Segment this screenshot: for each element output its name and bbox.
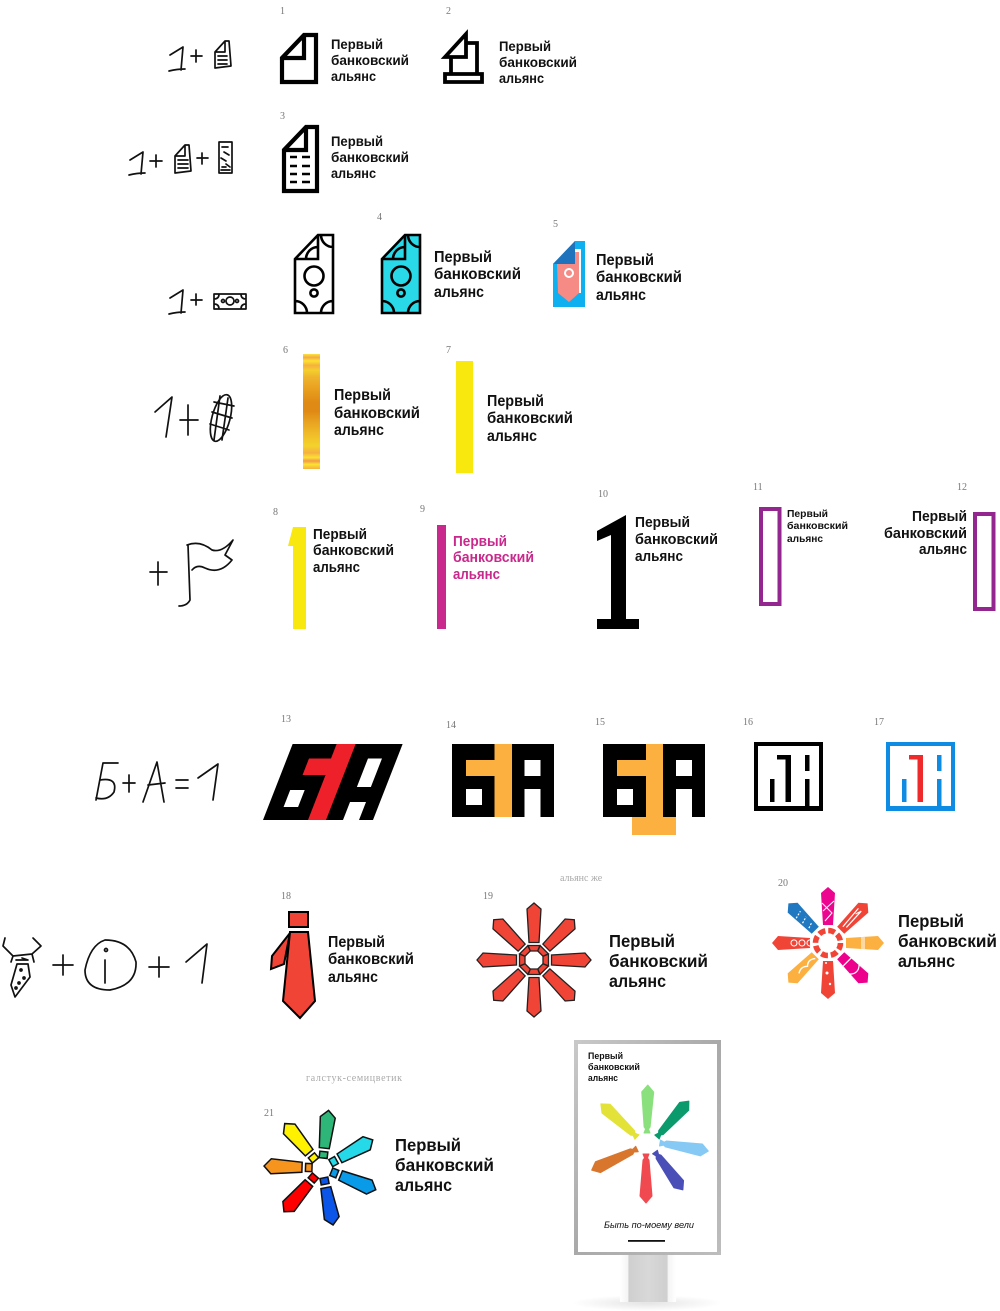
- caption: галстук-семицветик: галстук-семицветик: [306, 1073, 402, 1084]
- sketch: tie + i + 1: [3, 938, 207, 997]
- sketch: 1 + document: [169, 41, 231, 71]
- number 19: 19: [483, 891, 493, 902]
- logo 1: банковский: [331, 52, 409, 68]
- sketch: Б + А = 1: [96, 762, 218, 802]
- logo 8: банковский: [313, 543, 394, 559]
- logo 5: [553, 241, 682, 307]
- number 20: 20: [778, 878, 788, 889]
- poster stand mockup: альянс: [588, 1073, 618, 1084]
- number 18: 18: [281, 891, 291, 902]
- logo 9: банковский: [453, 550, 534, 566]
- logo 20: patterned tie star: альянс: [898, 951, 955, 971]
- logo 7: [456, 361, 573, 473]
- logo 12: Первый: [912, 508, 967, 525]
- poster stand mockup: банковский: [588, 1062, 640, 1073]
- logo 17: blue framed monogram: [886, 742, 955, 811]
- number 13: 13: [281, 714, 291, 725]
- logo 1: [282, 35, 409, 84]
- logo 6: альянс: [334, 422, 384, 439]
- logo 12: [884, 508, 994, 609]
- logo 21: rainbow tie star: альянс: [395, 1175, 452, 1195]
- logo 11: альянс: [787, 533, 823, 545]
- logo 20: patterned tie star: [772, 887, 997, 999]
- logo 11: Первый: [787, 508, 828, 520]
- logo 6: [303, 354, 420, 469]
- sketch: 1 + coin: [155, 392, 236, 444]
- logo 21: rainbow tie star: банковский: [395, 1155, 494, 1175]
- sketch: plus flag: [150, 540, 233, 606]
- logo 12: альянс: [919, 541, 967, 558]
- poster stand mockup: Быть по-моему вели: [604, 1220, 694, 1230]
- logo 8: альянс: [313, 560, 360, 576]
- poster stand mockup: [572, 1040, 722, 1311]
- logo 18: red tie: альянс: [328, 969, 378, 986]
- logo 11: [761, 508, 848, 604]
- logo 21: rainbow tie star: Первый: [395, 1135, 461, 1155]
- logo 11: банковский: [787, 520, 848, 532]
- logo 4: альянс: [434, 284, 484, 301]
- number 3: 3: [280, 111, 285, 122]
- logo 7: Первый: [487, 393, 544, 410]
- number 4: 4: [377, 212, 382, 223]
- logo 4: [382, 235, 521, 313]
- number 8: 8: [273, 507, 278, 518]
- logo 6: банковский: [334, 405, 420, 422]
- number 9: 9: [420, 504, 425, 515]
- logo 10: альянс: [635, 548, 683, 565]
- logo 20: patterned tie star: Первый: [898, 911, 964, 931]
- logo 15: BA with extended stem: [603, 744, 705, 835]
- logo 20: patterned tie star: банковский: [898, 931, 997, 951]
- logo 16: framed monogram: [754, 742, 823, 811]
- number 1: 1: [280, 6, 285, 17]
- logo 1: Первый: [331, 36, 383, 52]
- logo 1: альянс: [331, 68, 376, 84]
- logo 2: [445, 34, 577, 86]
- logo 19: red tie star: банковский: [609, 951, 708, 971]
- logo 3: банковский: [331, 149, 409, 165]
- logo 4: банковский: [434, 266, 521, 283]
- logo 4: Первый: [434, 249, 492, 266]
- logo 12: банковский: [884, 525, 967, 542]
- logo 5: альянс: [596, 287, 646, 304]
- sketch: 1 + document + column: [129, 142, 232, 175]
- number 21: 21: [264, 1108, 274, 1119]
- number 10: 10: [598, 489, 608, 500]
- number 5: 5: [553, 219, 558, 230]
- logo 13: BA parallelogram: [263, 744, 403, 820]
- number 15: 15: [595, 717, 605, 728]
- poster stand mockup: Первый: [588, 1051, 623, 1062]
- number 16: 16: [743, 717, 753, 728]
- logo 18: red tie: Первый: [328, 934, 385, 951]
- logo 7: альянс: [487, 428, 537, 445]
- logo 14: BA square: [452, 744, 554, 817]
- logo 19: red tie star: Первый: [609, 931, 675, 951]
- logo 10: [597, 514, 718, 629]
- logo 10: Первый: [635, 514, 690, 531]
- logo 3: [284, 127, 409, 191]
- logo 18: red tie: банковский: [328, 951, 414, 968]
- logo 7: банковский: [487, 410, 573, 427]
- logo 21: rainbow tie star: [264, 1110, 494, 1226]
- logo 10: банковский: [635, 531, 718, 548]
- logo 3: Первый: [331, 133, 383, 149]
- logo 19: red tie star: альянс: [609, 971, 666, 991]
- logo 5: Первый: [596, 252, 654, 269]
- logo 3: альянс: [331, 165, 376, 181]
- number 11: 11: [753, 482, 763, 493]
- number 7: 7: [446, 345, 451, 356]
- logo 2: Первый: [499, 38, 551, 54]
- number 6: 6: [283, 345, 288, 356]
- number 17: 17: [874, 717, 884, 728]
- sketch: 1 + banknote: [169, 290, 246, 314]
- logo 9: [437, 525, 534, 629]
- logo 5: банковский: [596, 269, 682, 286]
- logo 9: альянс: [453, 567, 500, 583]
- logo 2: банковский: [499, 54, 577, 70]
- logo 2: альянс: [499, 70, 544, 86]
- logo 18: red tie: [271, 912, 414, 1018]
- caption: альянс же: альянс же: [560, 873, 603, 884]
- logo 19: red tie star: [477, 903, 708, 1017]
- number 14: 14: [446, 720, 456, 731]
- logo 9: Первый: [453, 534, 507, 550]
- logo 8: Первый: [313, 527, 367, 543]
- logo 6: Первый: [334, 387, 391, 404]
- logo 8: [288, 527, 394, 629]
- logo 4 outline icon: [295, 235, 333, 313]
- number 12: 12: [957, 482, 967, 493]
- number 2: 2: [446, 6, 451, 17]
